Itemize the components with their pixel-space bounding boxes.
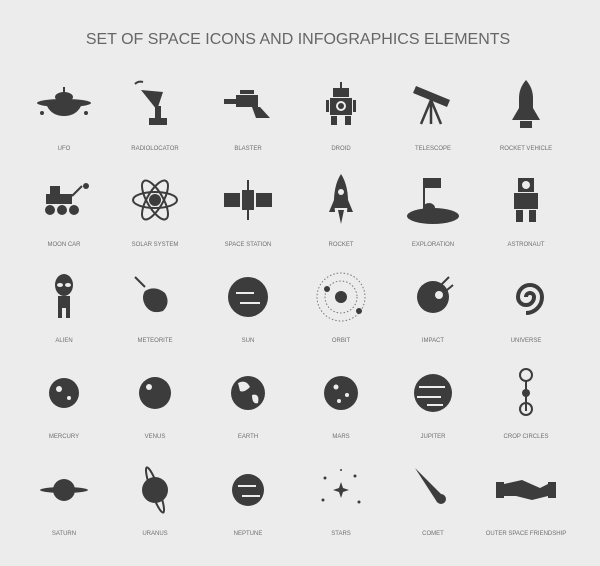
labels: MARS — [332, 434, 350, 440]
labels: OUTER SPACE FRIENDSHIP — [486, 531, 566, 537]
labels: EXPLORATION — [412, 242, 454, 248]
labels: ASTRONAUT — [507, 242, 545, 248]
labels: IMPACT — [422, 338, 444, 344]
labels: SATURN — [52, 531, 76, 537]
icon: crop circles — [520, 369, 532, 415]
title: SET OF SPACE ICONS AND INFOGRAPHICS ELEMENTS — [86, 31, 510, 48]
icon: alien — [55, 274, 73, 318]
icon: outer space friendship — [496, 480, 556, 500]
labels: ORBIT — [332, 338, 350, 344]
icon: saturn — [40, 479, 88, 501]
labels: RADIOLOCATOR — [131, 146, 179, 152]
icon: uranus — [142, 466, 168, 514]
icon: mars — [324, 376, 358, 410]
icon: space station — [224, 180, 272, 220]
labels: SPACE STATION — [225, 242, 271, 248]
labels: STARS — [331, 531, 351, 537]
icon: exploration — [407, 178, 459, 224]
icon: rocket — [329, 174, 353, 224]
labels: CROP CIRCLES — [504, 434, 548, 440]
icon: meteorite — [135, 277, 168, 312]
icon: orbit — [317, 273, 365, 321]
labels: COMET — [422, 531, 444, 537]
labels: MOON CAR — [48, 242, 81, 248]
icon: telescope — [413, 86, 450, 124]
labels: SOLAR SYSTEM — [132, 242, 178, 248]
icon: venus — [139, 377, 171, 409]
icon: impact — [417, 277, 453, 313]
icon: blaster — [224, 90, 270, 118]
icon: earth — [231, 376, 265, 410]
labels: MERCURY — [49, 434, 79, 440]
labels: NEPTUNE — [234, 531, 262, 537]
icon: droid — [326, 82, 356, 125]
icon: moon car — [45, 183, 89, 215]
labels: UFO — [58, 146, 71, 152]
icon: neptune — [232, 474, 264, 506]
labels: SUN — [242, 338, 254, 344]
labels: ROCKET VEHICLE — [500, 146, 552, 152]
labels: VENUS — [145, 434, 165, 440]
icon: ufo — [37, 87, 91, 116]
labels: ALIEN — [55, 338, 73, 344]
labels: JUPITER — [420, 434, 446, 440]
labels: EARTH — [238, 434, 258, 440]
labels: ROCKET — [328, 242, 354, 248]
labels: METEORITE — [137, 338, 173, 344]
labels: BLASTER — [234, 146, 262, 152]
icon: comet — [415, 468, 446, 504]
icon: rocket vehicle — [512, 80, 540, 128]
icon: sun — [228, 277, 268, 317]
icon: radiolocator — [135, 82, 167, 125]
icon: jupiter — [414, 374, 452, 412]
labels: URANUS — [142, 531, 168, 537]
icon grid — [37, 80, 556, 514]
icon: stars — [322, 469, 360, 504]
icon: solar system — [133, 177, 177, 223]
labels: DROID — [331, 146, 351, 152]
labels — [48, 146, 566, 537]
labels: TELESCOPE — [415, 146, 451, 152]
icon: universe — [518, 285, 542, 313]
icon: astronaut — [514, 178, 538, 222]
labels: UNIVERSE — [511, 338, 541, 344]
icon: mercury — [49, 378, 79, 408]
